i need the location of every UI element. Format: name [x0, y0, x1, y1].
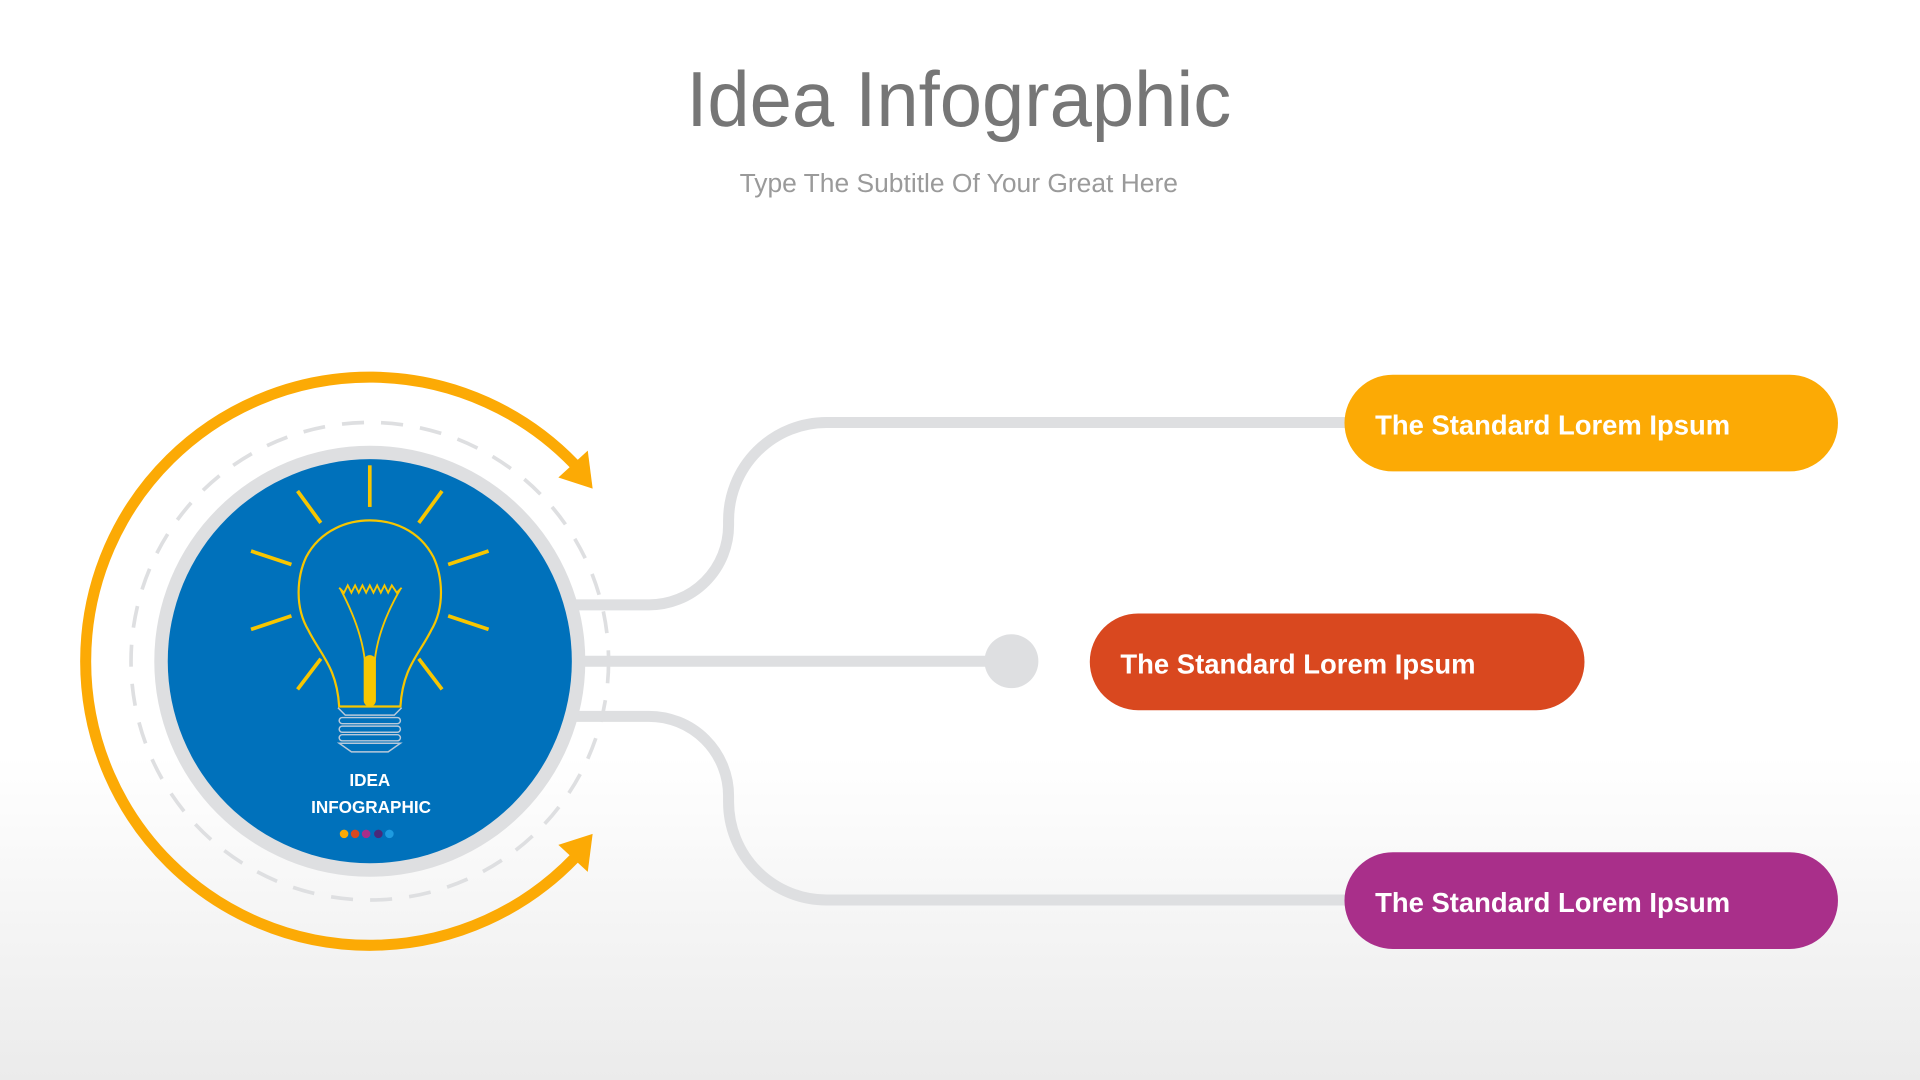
- central circle: [154, 446, 585, 877]
- pill: middle: [1090, 613, 1584, 710]
- pill: bottom: The Standard Lorem Ipsum: [1375, 887, 1730, 918]
- pill: top: The Standard Lorem Ipsum: [1375, 410, 1730, 441]
- subtitle: Type The Subtitle Of Your Great Here: [740, 170, 1178, 198]
- pill: top: [1344, 375, 1838, 471]
- title: Idea Infographic: [686, 55, 1231, 143]
- connector dot: [984, 634, 1038, 688]
- dashed ring: [131, 422, 609, 900]
- connector lines: [563, 422, 1359, 900]
- center label: IDEA: [349, 770, 390, 790]
- orange cycle arrow: [86, 377, 593, 945]
- pill: middle: The Standard Lorem Ipsum: [1120, 648, 1476, 679]
- color dots: [340, 830, 394, 838]
- central circle: INFOGRAPHIC: [311, 797, 431, 817]
- icon: light bulb: [251, 465, 489, 707]
- pill: bottom: [1344, 852, 1838, 949]
